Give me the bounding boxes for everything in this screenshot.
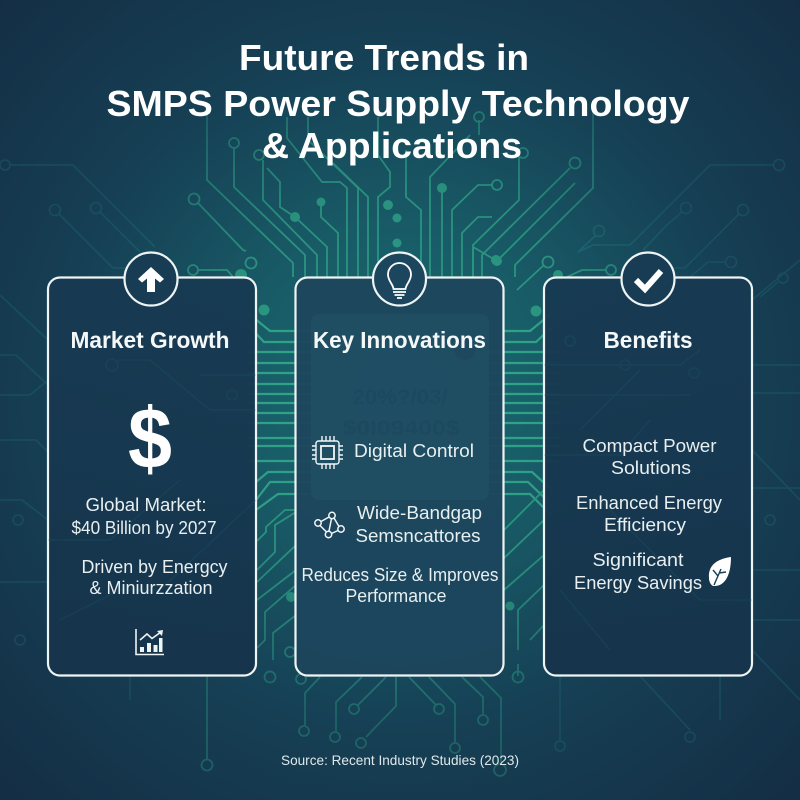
icon: growth chart — [136, 629, 164, 654]
text: wide-bandgap: Semsncattores — [356, 526, 480, 546]
panel: key innovations — [296, 252, 504, 676]
title: SMPS Power Supply Technology — [106, 83, 690, 124]
text: compact power: Solutions — [611, 458, 691, 478]
card 3 frame — [544, 278, 752, 676]
right bus lines — [504, 319, 543, 508]
panel: market growth — [48, 252, 256, 676]
text: drivers — [82, 557, 228, 598]
text: reduces size: Performance — [346, 586, 446, 606]
icon: dollar sign: $ — [128, 391, 172, 487]
text: enhanced efficiency: Efficiency — [604, 515, 686, 535]
text: global market — [72, 495, 216, 538]
text: reduces size — [302, 565, 498, 606]
card 1 faint traces — [48, 359, 256, 620]
card 2 frame — [296, 278, 504, 676]
text: energy savings — [574, 550, 702, 593]
icon: chip — [312, 436, 343, 469]
title — [106, 37, 690, 166]
ghost text — [342, 338, 476, 440]
text: energy savings: Energy Savings — [574, 573, 702, 593]
text: enhanced efficiency: Enhanced Energy — [576, 493, 722, 513]
text: compact power — [582, 436, 716, 478]
text: global market: Global Market: — [86, 495, 206, 515]
lower gap traces — [257, 510, 296, 541]
ghost text: $0I09400$ — [342, 417, 460, 440]
text: digital control: Digital Control — [354, 441, 474, 461]
left bus lines — [248, 313, 312, 510]
ghost inner panel — [311, 314, 489, 500]
heading: benefits: Benefits — [604, 327, 692, 353]
text: wide-bandgap — [356, 503, 482, 546]
text: compact power: Compact Power — [582, 436, 716, 456]
ghost text: 20%?/03/ — [352, 386, 448, 409]
icon: molecule network — [315, 512, 344, 538]
top right traces — [258, 110, 788, 316]
text: enhanced efficiency — [576, 493, 722, 535]
title: & Applications — [262, 125, 522, 166]
icon: up arrow in circle — [124, 252, 178, 306]
icon: light bulb in circle — [373, 252, 426, 306]
bottom traces — [206, 676, 208, 759]
source note: Source: Recent Industry Studies (2023) — [281, 752, 519, 768]
text: drivers: Driven by Energcy — [82, 557, 228, 577]
icon: check mark in circle — [622, 252, 674, 306]
card 3 faint traces — [544, 336, 752, 650]
heading: key innovations: Key Innovations — [313, 327, 486, 353]
text: drivers: & Miniurzzation — [90, 578, 212, 598]
heading: market growth: Market Growth — [70, 327, 230, 353]
text: energy savings: Significant — [592, 550, 684, 570]
side traces — [0, 295, 48, 340]
text: wide-bandgap: Wide-Bandgap — [357, 503, 482, 523]
icon: leaf — [709, 557, 731, 586]
text: reduces size: Reduces Size & Improves — [302, 565, 498, 585]
top left traces — [0, 113, 402, 281]
title: Future Trends in — [239, 37, 529, 78]
card 1 frame — [48, 278, 256, 676]
panel: benefits — [544, 252, 752, 676]
text: global market: $40 Billion by 2027 — [72, 518, 216, 538]
